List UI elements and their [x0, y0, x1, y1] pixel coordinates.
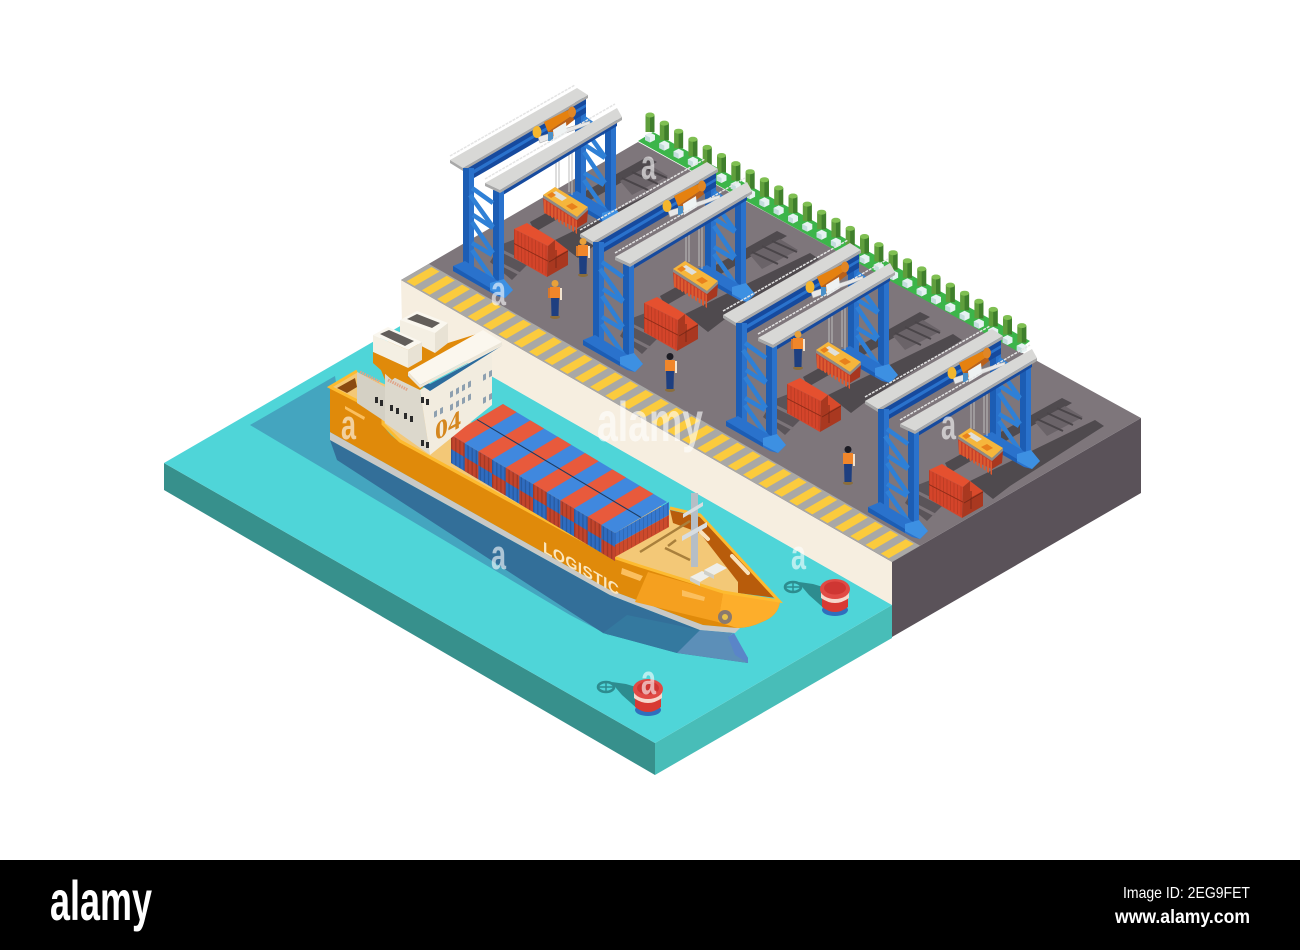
hull bottom [330, 440, 748, 663]
worker 5 [843, 446, 855, 485]
bow inner wall [670, 510, 776, 598]
ship shadow on water [250, 376, 610, 636]
worker 1 [548, 280, 562, 319]
watermark: a [641, 656, 656, 703]
lower aft block [357, 372, 387, 423]
bow panel [635, 572, 723, 622]
watermark [341, 141, 956, 703]
green hedge strip [638, 132, 1030, 351]
gantry crane 2 [580, 159, 819, 372]
water block: left side [164, 463, 655, 775]
gantry crane 3 [723, 240, 962, 453]
bridge railings [360, 372, 408, 390]
quay cream walkway [401, 280, 892, 605]
worker 3 [665, 353, 677, 392]
watermark: a [791, 531, 806, 578]
windows left face [375, 397, 429, 448]
bridge roof [408, 330, 502, 385]
watermark: a [341, 401, 356, 448]
gantry crane 4 [865, 326, 1104, 539]
front funnel [373, 327, 422, 380]
container block: end [615, 502, 669, 545]
row of planters [645, 112, 1027, 353]
block behind funnels [373, 332, 483, 390]
hull marks [345, 406, 705, 601]
deck crates [690, 563, 727, 586]
hull orange side [330, 388, 780, 628]
website: www.alamy.com [1114, 907, 1250, 928]
hull name: LOGISTIC [543, 538, 619, 600]
striped safety band [401, 264, 920, 562]
watermark: a [641, 141, 656, 188]
stern hatch [337, 378, 357, 393]
watermark: a [491, 267, 506, 314]
main deck [330, 372, 738, 593]
quay deck [401, 142, 1141, 562]
worker 2 [576, 238, 590, 277]
mooring buoy right [785, 579, 850, 616]
bow tip panel [718, 593, 780, 628]
mast [682, 493, 707, 567]
image id: Image ID: 2EG9FET [1123, 885, 1250, 902]
watermark: a [491, 531, 506, 578]
ship number: 04 [435, 404, 461, 448]
quay side wall [892, 418, 1141, 637]
container block: long side [451, 435, 615, 561]
water block: right side [655, 605, 892, 775]
windows right face [434, 369, 492, 431]
bridge glass band [407, 345, 503, 391]
rear funnel [400, 311, 448, 353]
superstructure right face [420, 350, 492, 455]
bow bulwark ovals [701, 532, 748, 573]
cargo ship [330, 311, 780, 663]
watermark: a [941, 401, 956, 448]
bow rim [330, 371, 779, 601]
footer logo: alamy [50, 869, 152, 932]
gantry crane 1 [450, 85, 689, 298]
footer bar [0, 860, 1300, 950]
mast shadow [640, 521, 690, 560]
watermark: alamy [597, 390, 703, 453]
mooring buoy left [598, 679, 663, 716]
water surface [164, 325, 892, 743]
worker 4 [791, 331, 805, 370]
anchor emblem [718, 610, 732, 624]
superstructure left face [385, 373, 430, 455]
hull waterline stripe [330, 432, 740, 633]
container block: top [451, 404, 667, 533]
